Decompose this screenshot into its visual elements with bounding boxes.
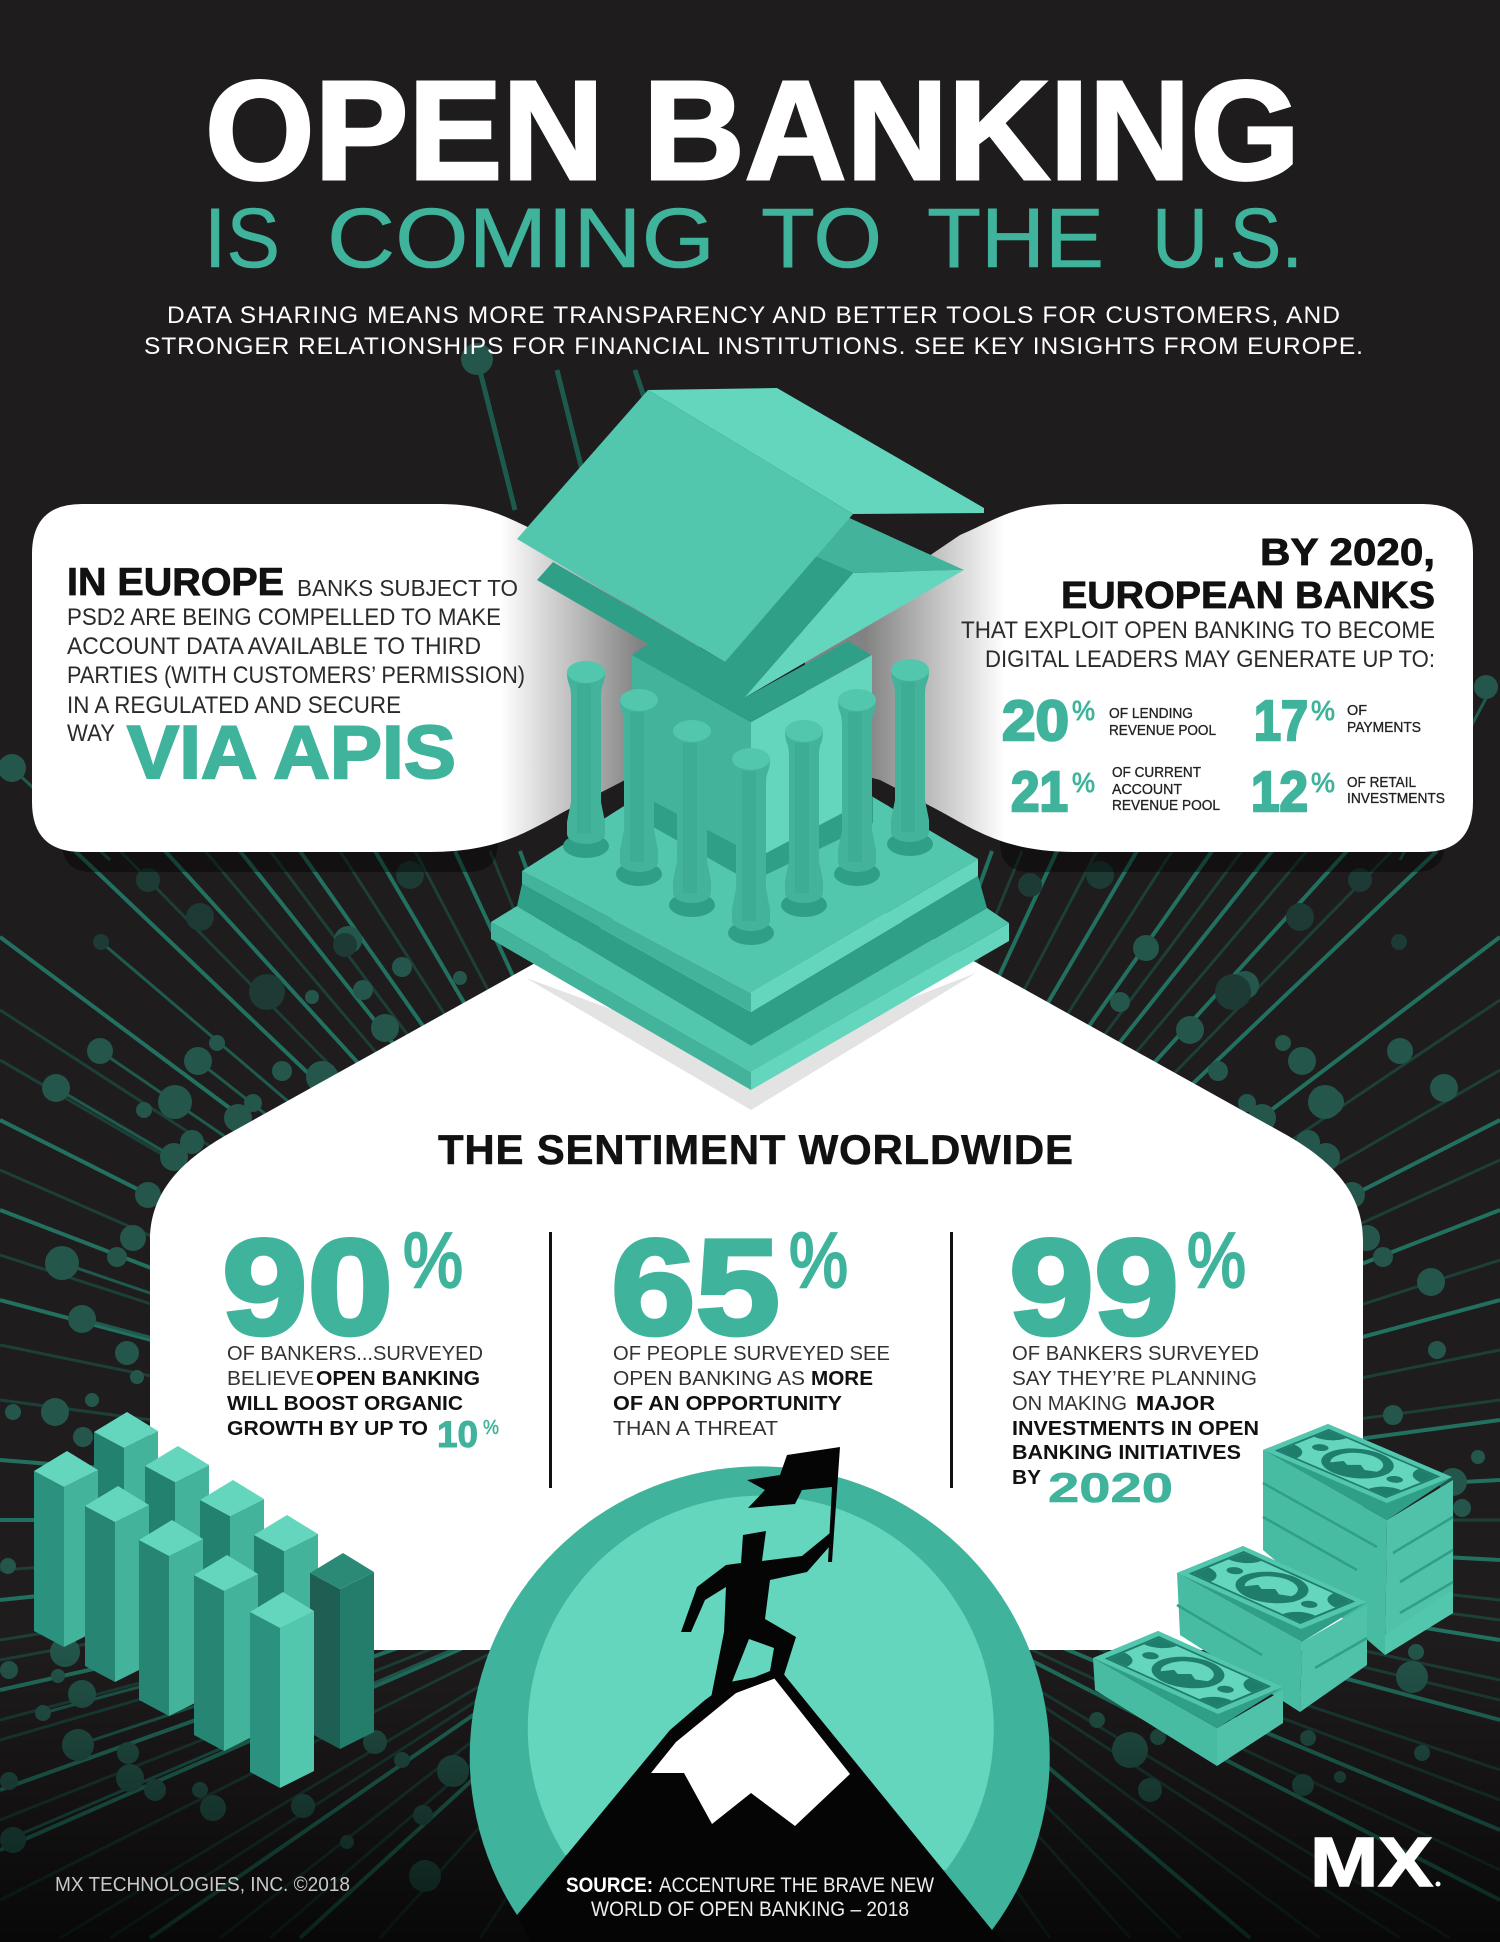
column 1: 90 percent: GROWTH BY UP TO bbox=[227, 1417, 428, 1440]
column 1: 90 percent: OPEN BANKING bbox=[316, 1367, 480, 1390]
building core bbox=[632, 655, 873, 882]
intro text: DATA SHARING MEANS MORE TRANSPARENCY AND BETTER TOOLS FOR CUSTOMERS, AND bbox=[167, 302, 1340, 329]
paragraph: WAY bbox=[67, 720, 115, 747]
icon: stacks of money bbox=[1093, 1424, 1453, 1766]
stat: 17 percent bbox=[1254, 689, 1421, 753]
column 2: 65 percent: OF AN OPPORTUNITY bbox=[613, 1392, 842, 1415]
column 1: 90 percent: % bbox=[403, 1216, 463, 1304]
icon: bank building bbox=[491, 388, 1009, 1090]
paragraph: PARTIES (WITH CUSTOMERS’ PERMISSION) bbox=[67, 662, 525, 689]
bank ground shadow bbox=[526, 973, 976, 1110]
stat: 20 percent: REVENUE POOL bbox=[1109, 723, 1216, 739]
panel description: THAT EXPLOIT OPEN BANKING TO BECOME bbox=[961, 617, 1435, 644]
mountain bbox=[517, 1672, 1005, 1942]
lower platform bbox=[491, 876, 1009, 1090]
column 3: 99 percent: BANKING INITIATIVES bbox=[1012, 1441, 1241, 1464]
column 1: 90 percent: OF BANKERS...SURVEYED bbox=[227, 1342, 483, 1365]
column 3: 99 percent: BY bbox=[1012, 1466, 1041, 1489]
subtitle heading: IS bbox=[204, 191, 280, 285]
panel shadows bbox=[62, 700, 1445, 872]
stat: 20 percent: 20 bbox=[1002, 689, 1069, 753]
climber figure bbox=[681, 1531, 830, 1708]
intro text: STRONGER RELATIONSHIPS FOR FINANCIAL INSTITUTIONS. SEE KEY INSIGHTS FROM EUROPE. bbox=[144, 333, 1363, 360]
stat: 20 percent: % bbox=[1072, 695, 1095, 726]
icon: mountain climber badge bbox=[470, 1447, 1050, 1942]
stat: 17 percent: PAYMENTS bbox=[1347, 720, 1421, 736]
column 3: 99 percent: ON MAKING bbox=[1012, 1392, 1127, 1415]
column 2: 65 percent: MORE bbox=[811, 1367, 873, 1390]
heading: sentiment: THE SENTIMENT WORLDWIDE bbox=[438, 1126, 1073, 1173]
medium stack bbox=[1177, 1546, 1367, 1712]
heading: by 2020 bbox=[1061, 532, 1435, 617]
paragraph: ACCOUNT DATA AVAILABLE TO THIRD bbox=[67, 633, 481, 660]
stat: 12 percent: 12 bbox=[1251, 760, 1308, 824]
via APIs callout: VIA APIS bbox=[127, 710, 456, 794]
heading: by 2020: EUROPEAN BANKS bbox=[1061, 575, 1435, 617]
stat: 12 percent: % bbox=[1311, 767, 1335, 798]
column 3: 99 percent: SAY THEY’RE PLANNING bbox=[1012, 1367, 1257, 1390]
column 3: 99 percent: % bbox=[1187, 1216, 1246, 1304]
column 3: 99 percent: 2020 bbox=[1048, 1464, 1173, 1511]
source citation: ACCENTURE THE BRAVE NEW bbox=[659, 1874, 934, 1897]
stat: 12 percent: OF RETAIL bbox=[1347, 775, 1416, 791]
source citation: SOURCE: bbox=[566, 1874, 653, 1897]
upper platform bbox=[522, 725, 978, 1012]
panel: sentiment worldwide bbox=[150, 840, 1363, 1650]
stat: 17 percent: 17 bbox=[1254, 689, 1308, 753]
column 1: 90 percent: 10 bbox=[437, 1414, 478, 1455]
column 1: 90 percent: % bbox=[483, 1417, 499, 1439]
stat: 17 percent: % bbox=[1311, 695, 1335, 726]
title: OPEN BANKING bbox=[205, 51, 1300, 209]
paragraph: IN A REGULATED AND SECURE bbox=[67, 692, 401, 719]
column 1: 90 percent: 90 bbox=[222, 1211, 393, 1363]
stat: 17 percent: OF bbox=[1347, 703, 1367, 719]
icon: isometric bar chart bbox=[34, 1412, 374, 1788]
paragraph bbox=[67, 575, 525, 747]
stat: 12 percent: INVESTMENTS bbox=[1347, 791, 1445, 807]
subtitle heading: COMING bbox=[327, 191, 715, 285]
panel description bbox=[961, 617, 1435, 673]
stat: 21 percent: REVENUE POOL bbox=[1112, 798, 1220, 814]
small stack bbox=[1093, 1631, 1283, 1766]
column 3: 99 percent: INVESTMENTS IN OPEN bbox=[1012, 1417, 1259, 1440]
column 2: 65 percent bbox=[611, 1211, 890, 1440]
column 2: 65 percent: OF PEOPLE SURVEYED SEE bbox=[613, 1342, 890, 1365]
subtitle heading: U.S. bbox=[1152, 191, 1303, 285]
column 1: 90 percent: WILL BOOST ORGANIC bbox=[227, 1392, 463, 1415]
column 1: 90 percent bbox=[222, 1211, 499, 1455]
divider bbox=[549, 1232, 552, 1488]
roof bbox=[517, 388, 984, 722]
paragraph: BANKS SUBJECT TO bbox=[297, 575, 518, 601]
copyright: MX TECHNOLOGIES, INC. ©2018 bbox=[55, 1874, 350, 1896]
stat: 12 percent bbox=[1251, 760, 1445, 824]
heading: in Europe: IN EUROPE bbox=[67, 561, 284, 604]
subtitle heading bbox=[204, 191, 1303, 285]
columns bbox=[563, 659, 933, 945]
panel: by 2020 bbox=[805, 504, 1473, 852]
column 3: 99 percent: OF BANKERS SURVEYED bbox=[1012, 1342, 1259, 1365]
stat: 21 percent: OF CURRENT bbox=[1112, 765, 1201, 781]
divider bbox=[950, 1232, 953, 1488]
heading: by 2020: BY 2020, bbox=[1260, 532, 1435, 574]
snow cap bbox=[651, 1678, 850, 1826]
source citation bbox=[566, 1874, 934, 1921]
column 2: 65 percent: % bbox=[789, 1216, 848, 1304]
stat: 21 percent: % bbox=[1072, 767, 1095, 798]
column 3: 99 percent bbox=[1009, 1211, 1259, 1511]
stat: 21 percent: ACCOUNT bbox=[1112, 782, 1182, 798]
column 3: 99 percent: 99 bbox=[1009, 1211, 1179, 1363]
column 2: 65 percent: 65 bbox=[611, 1211, 780, 1363]
panel: in Europe bbox=[32, 504, 700, 852]
subtitle heading: TO bbox=[761, 191, 882, 285]
column 3: 99 percent: MAJOR bbox=[1136, 1392, 1215, 1415]
outer circle bbox=[470, 1466, 1050, 1930]
title bbox=[204, 51, 1303, 285]
panel description: DIGITAL LEADERS MAY GENERATE UP TO: bbox=[985, 646, 1435, 673]
flag bbox=[747, 1447, 840, 1562]
column 1: 90 percent: BELIEVE bbox=[227, 1367, 314, 1390]
column 2: 65 percent: THAN A THREAT bbox=[613, 1417, 778, 1440]
subtitle heading: THE bbox=[927, 191, 1104, 285]
source citation: WORLD OF OPEN BANKING – 2018 bbox=[591, 1898, 909, 1921]
large stack bbox=[1263, 1424, 1453, 1655]
bottom fade bbox=[0, 1640, 1500, 1942]
intro text bbox=[144, 302, 1363, 360]
column 2: 65 percent: OPEN BANKING AS bbox=[613, 1367, 805, 1390]
stat: 20 percent: OF LENDING bbox=[1109, 706, 1193, 722]
MX logo: MX bbox=[1310, 1823, 1433, 1901]
paragraph: PSD2 ARE BEING COMPELLED TO MAKE bbox=[67, 604, 501, 631]
inner circle bbox=[528, 1496, 994, 1870]
stat: 20 percent bbox=[1002, 689, 1216, 753]
stat: 21 percent bbox=[1011, 760, 1220, 824]
stat: 21 percent: 21 bbox=[1011, 760, 1068, 824]
